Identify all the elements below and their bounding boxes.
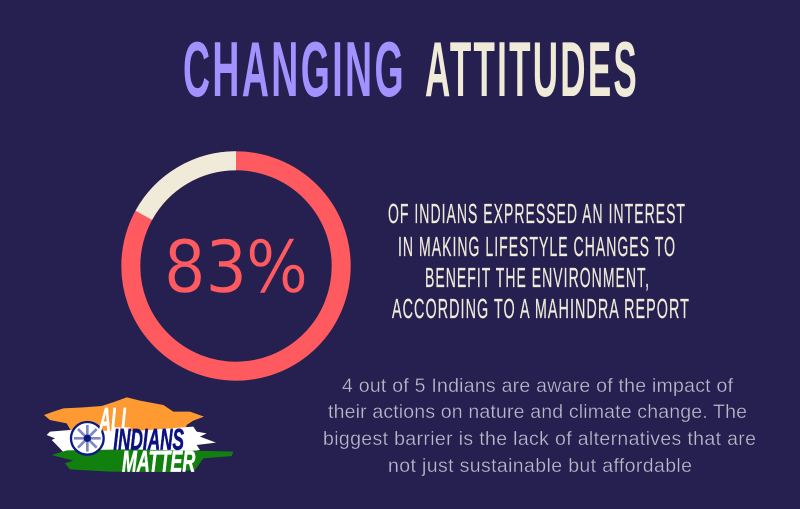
logo flag brush strokes: [44, 397, 233, 472]
donut value: %: [246, 225, 308, 309]
supporting paragraph: biggest barrier is the lack of alternatives that are: [323, 428, 756, 450]
donut value: 83: [164, 225, 247, 309]
supporting paragraph: not just sustainable but affordable: [388, 455, 692, 477]
logo wordmark: INDIANS: [113, 423, 184, 456]
donut chart: 83 percent: [131, 161, 341, 371]
logo wordmark: [99, 402, 195, 479]
supporting paragraph: [323, 375, 756, 477]
donut value: [164, 225, 308, 309]
statement text: [388, 198, 690, 324]
logo: All Indians Matter: [44, 397, 233, 479]
title: CHANGING: [183, 25, 406, 113]
logo wordmark: ALL: [99, 402, 131, 440]
supporting paragraph: 4 out of 5 Indians are aware of the impact of: [342, 375, 734, 397]
logo wordmark: MATTER: [122, 446, 195, 479]
logo wheel: [71, 422, 104, 455]
supporting paragraph: their actions on nature and climate change. The: [328, 401, 747, 423]
